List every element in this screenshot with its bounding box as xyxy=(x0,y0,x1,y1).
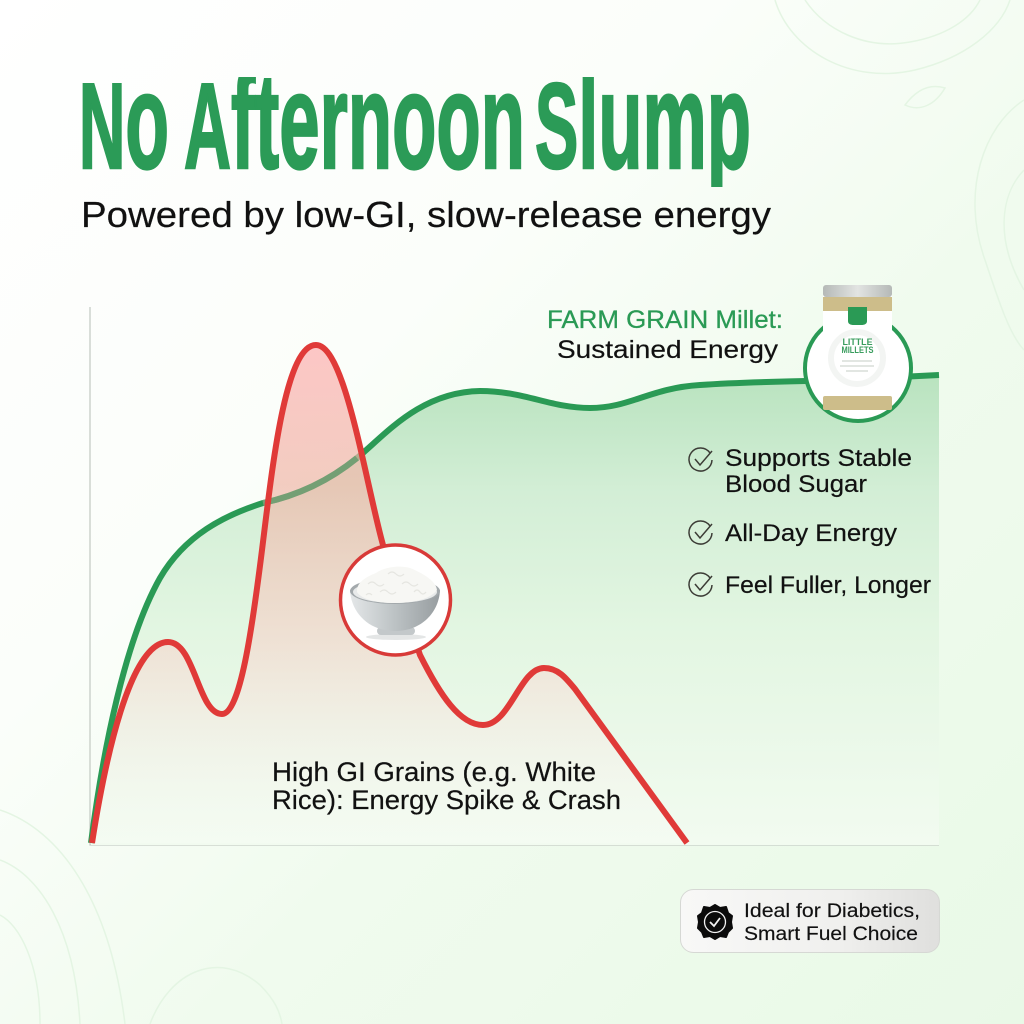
millet energy curve xyxy=(91,375,939,843)
benefit: stable blood sugar: Blood Sugar xyxy=(725,471,867,498)
icon: check xyxy=(689,521,712,544)
badge panel xyxy=(680,890,940,952)
benefit: stable blood sugar xyxy=(689,445,912,498)
badge: Smart Fuel Choice xyxy=(744,924,918,945)
benefit: feel fuller: Feel Fuller, Longer xyxy=(725,572,931,599)
millet energy area xyxy=(91,375,939,845)
millet label: FARM GRAIN Millet: xyxy=(547,306,783,334)
millet label: Sustained Energy xyxy=(557,336,779,364)
high GI curve xyxy=(92,345,687,843)
high GI area xyxy=(92,345,687,843)
benefit: stable blood sugar: Supports Stable xyxy=(725,445,912,472)
icon: jar xyxy=(823,285,892,410)
millet label xyxy=(547,306,783,364)
icon: jar: LITTLE xyxy=(842,337,872,347)
rice bowl callout xyxy=(340,545,450,655)
icon: seal check xyxy=(698,905,732,939)
energy chart xyxy=(90,307,939,845)
benefits list xyxy=(689,445,931,599)
title: Slump xyxy=(535,45,751,197)
badge: Ideal for Diabetics, xyxy=(744,901,920,922)
icon: rice bowl xyxy=(350,567,440,640)
title xyxy=(82,77,749,187)
millet curve seen through high GI area xyxy=(263,458,357,503)
green ring xyxy=(805,315,911,421)
title: No xyxy=(79,45,169,197)
high GI label: High GI Grains (e.g. White xyxy=(272,757,596,787)
benefit: all-day energy: All-Day Energy xyxy=(725,520,898,547)
red ring xyxy=(340,545,450,655)
high GI label xyxy=(272,757,621,815)
icon: check xyxy=(689,573,712,596)
title: Afternoon xyxy=(184,45,525,197)
subtitle: Powered by low-GI, slow-release energy xyxy=(81,194,771,235)
badge xyxy=(680,890,940,952)
high GI label: Rice): Energy Spike & Crash xyxy=(272,785,621,815)
icon: check xyxy=(689,448,712,471)
product jar callout xyxy=(805,285,911,421)
chart axes xyxy=(90,307,939,845)
icon: jar: MILLETS xyxy=(842,345,874,355)
